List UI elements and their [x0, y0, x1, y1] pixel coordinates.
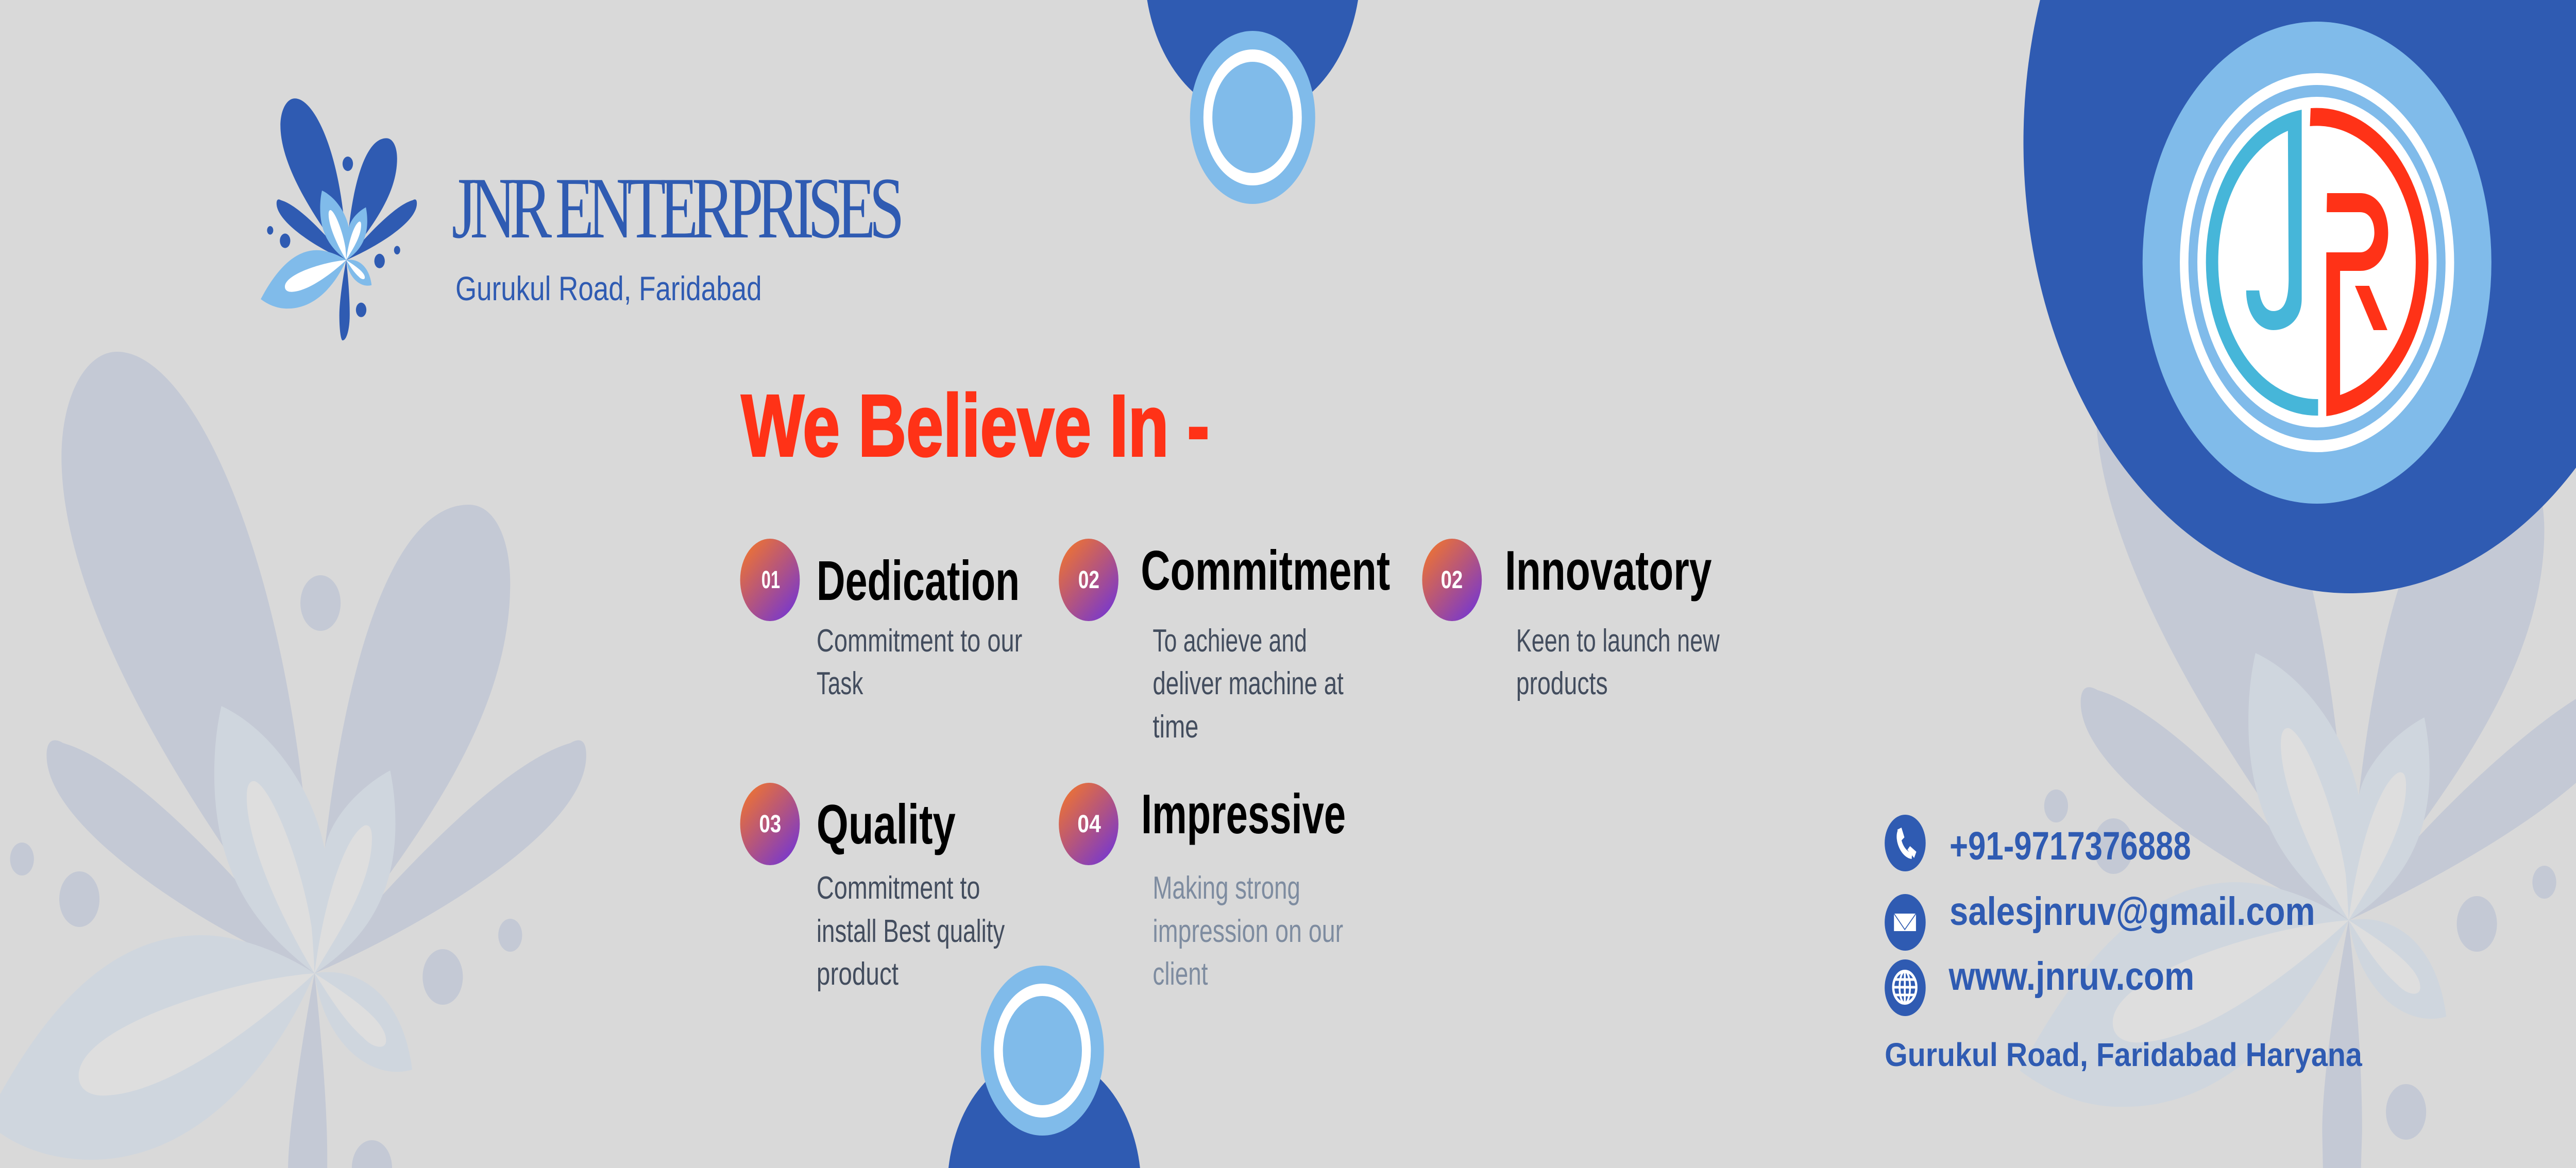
icon: letter R [2310, 108, 2429, 416]
item description [817, 623, 1022, 701]
icon: email [1885, 894, 1926, 951]
item description: Keen to launch new [1516, 623, 1720, 659]
item: Quality [740, 783, 1005, 992]
company location: Gurukul Road, Faridabad [455, 270, 762, 308]
item description: Commitment to our [817, 623, 1022, 659]
number badge 04 [1059, 783, 1118, 865]
item: Innovatory [1422, 539, 1720, 701]
item description: product [817, 956, 899, 992]
top decorative circle [1147, 0, 1358, 204]
item description: products [1516, 666, 1608, 701]
watermark flower left [0, 352, 586, 1168]
item heading: Impressive [1141, 783, 1346, 846]
item heading: Innovatory [1505, 540, 1712, 602]
icon: letter J [2206, 110, 2318, 416]
item heading: Quality [817, 794, 956, 856]
number badge 03 [740, 783, 800, 865]
email address: salesjnruv@gmail.com [1950, 889, 2315, 934]
item heading: Commitment [1141, 540, 1390, 602]
bottom decorative circle [948, 966, 1140, 1168]
item description [1153, 623, 1344, 745]
item description: Making strong [1153, 870, 1300, 906]
number badge 02: 02 [1078, 565, 1099, 593]
number badge 02 [1422, 539, 1482, 621]
contact details [1885, 815, 2363, 1073]
item description [1153, 870, 1343, 992]
phone number: +91-9717376888 [1950, 824, 2191, 868]
item description: client [1153, 956, 1208, 992]
item description: To achieve and [1153, 623, 1307, 659]
number badge 02 [1059, 539, 1118, 621]
number badge 03: 03 [759, 810, 781, 837]
icon: globe [1885, 959, 1926, 1016]
item description: install Best quality [817, 914, 1005, 949]
website: www.jnruv.com [1948, 954, 2194, 999]
item description: deliver machine at [1153, 666, 1344, 701]
top-right badge with JR logo [2023, 0, 2576, 593]
watermark flower right [2020, 299, 2576, 1168]
number badge 02: 02 [1441, 565, 1463, 593]
item: Impressive [1059, 783, 1346, 992]
item description [1516, 623, 1720, 701]
item description [817, 870, 1005, 992]
number badge 01 [740, 539, 800, 621]
address: Gurukul Road, Faridabad Haryana [1885, 1036, 2363, 1073]
item heading: Dedication [817, 550, 1020, 612]
company logo flower [261, 98, 417, 340]
main heading: We Believe In - [741, 377, 1209, 475]
company name: JNR ENTERPRISES [452, 160, 905, 257]
item description: time [1153, 709, 1198, 745]
item description: Task [817, 666, 863, 701]
item: Commitment [1059, 539, 1390, 745]
number badge 01: 01 [761, 565, 780, 593]
item description: impression on our [1153, 914, 1343, 949]
number badge 04: 04 [1077, 810, 1101, 837]
item: Dedication [740, 539, 1022, 701]
icon: phone [1885, 815, 1926, 871]
item description: Commitment to [817, 870, 980, 906]
